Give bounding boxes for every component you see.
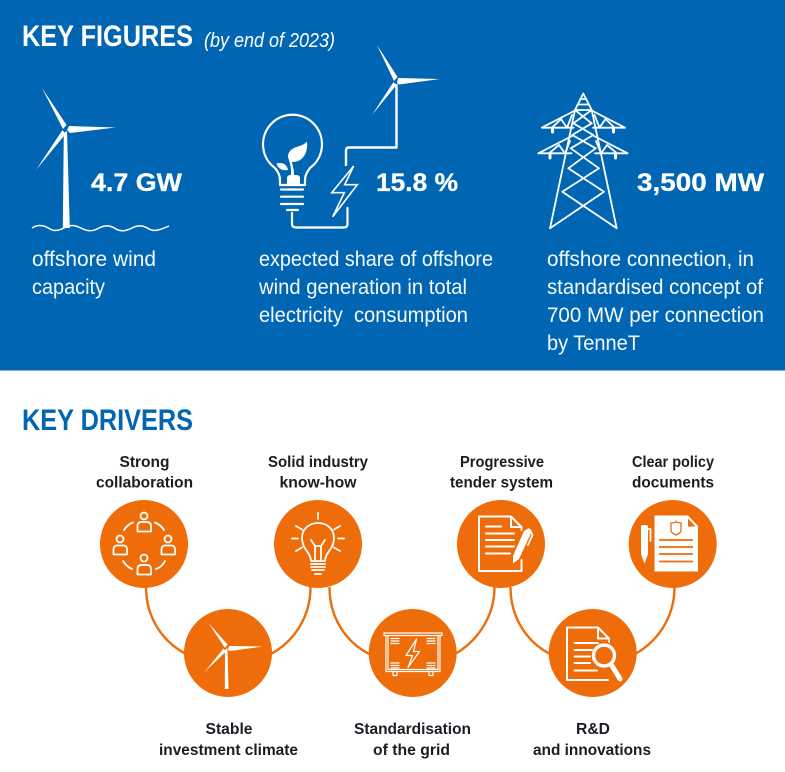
driver: R&D and innovations: [533, 609, 651, 759]
label: stable investment climate: Stable: [206, 721, 253, 738]
driver: clear policy documents: [629, 454, 717, 588]
text: offshore connection: offshore connection, in: [547, 248, 754, 271]
label: clear policy documents: [632, 454, 714, 492]
text: offshore connection: 700 MW per connection: [547, 304, 764, 327]
icon: turbine powering a light bulb: [263, 45, 440, 228]
driver: progressive tender system: [450, 454, 553, 588]
label: progressive tender system: Progressive: [460, 454, 544, 471]
icon: document and magnifier: [567, 628, 620, 680]
label: strong collaboration: Strong: [120, 454, 170, 471]
label: strong collaboration: collaboration: [96, 474, 193, 492]
label: clear policy documents: Clear policy: [632, 454, 714, 471]
icon: grid transformer cabinet: [384, 633, 442, 676]
label: strong collaboration: [96, 454, 193, 492]
driver: standardisation of the grid: [354, 609, 471, 759]
label: clear policy documents: documents: [632, 474, 714, 492]
text: offshore connection: by TenneT: [547, 332, 640, 355]
label: progressive tender system: [450, 454, 553, 492]
icon: light bulb: [292, 513, 344, 574]
icon: document and pen: [479, 516, 532, 571]
heading: key drivers: KEY DRIVERS: [22, 404, 193, 437]
text: offshore connection: standardised concept of: [547, 276, 763, 299]
driver: solid industry know-how: [268, 454, 368, 588]
text: offshore connection: [547, 248, 764, 355]
heading: key figures: KEY FIGURES: [22, 20, 193, 53]
icon: offshore wind turbine: [32, 88, 169, 231]
label: solid industry know-how: [268, 454, 368, 492]
label: stable investment climate: [159, 721, 298, 759]
icon: people in a circle: [114, 512, 175, 574]
driver: stable investment climate: [159, 609, 298, 759]
subheading: date: (by end of 2023): [204, 30, 335, 52]
icon: policy document and pen: [641, 516, 698, 572]
text: expected share: expected share of offshore: [259, 248, 493, 271]
text: offshore wind capacity: capacity: [32, 276, 105, 299]
label: progressive tender system: tender system: [450, 474, 553, 492]
figure: 15.8 %: 15.8 %: [376, 169, 458, 197]
text: expected share: electricity consumption: [259, 304, 468, 327]
label: standardisation of the grid: of the grid: [373, 742, 450, 759]
text: expected share: [258, 248, 493, 327]
text: offshore wind capacity: [32, 248, 156, 299]
label: standardisation of the grid: [354, 721, 471, 759]
driver: strong collaboration: [96, 454, 193, 588]
icon: wind turbine: [204, 623, 263, 689]
connector arcs: [146, 587, 674, 654]
text: offshore wind capacity: offshore wind: [32, 248, 156, 271]
label: standardisation of the grid: Standardisation: [354, 721, 471, 738]
panel: key figures: [0, 0, 785, 370]
label: R&D and innovations: and innovations: [533, 742, 651, 759]
figure: 3,500 MW: 3,500 MW: [637, 169, 764, 197]
figure: 4.7 GW: 4.7 GW: [91, 169, 182, 197]
label: R&D and innovations: R&D: [576, 721, 610, 738]
icon: transmission pylon: [538, 94, 628, 228]
label: solid industry know-how: know-how: [280, 474, 357, 492]
label: stable investment climate: investment climate: [159, 742, 298, 759]
label: solid industry know-how: Solid industry: [268, 454, 368, 471]
text: expected share: wind generation in total: [258, 276, 467, 299]
label: R&D and innovations: [533, 721, 651, 759]
